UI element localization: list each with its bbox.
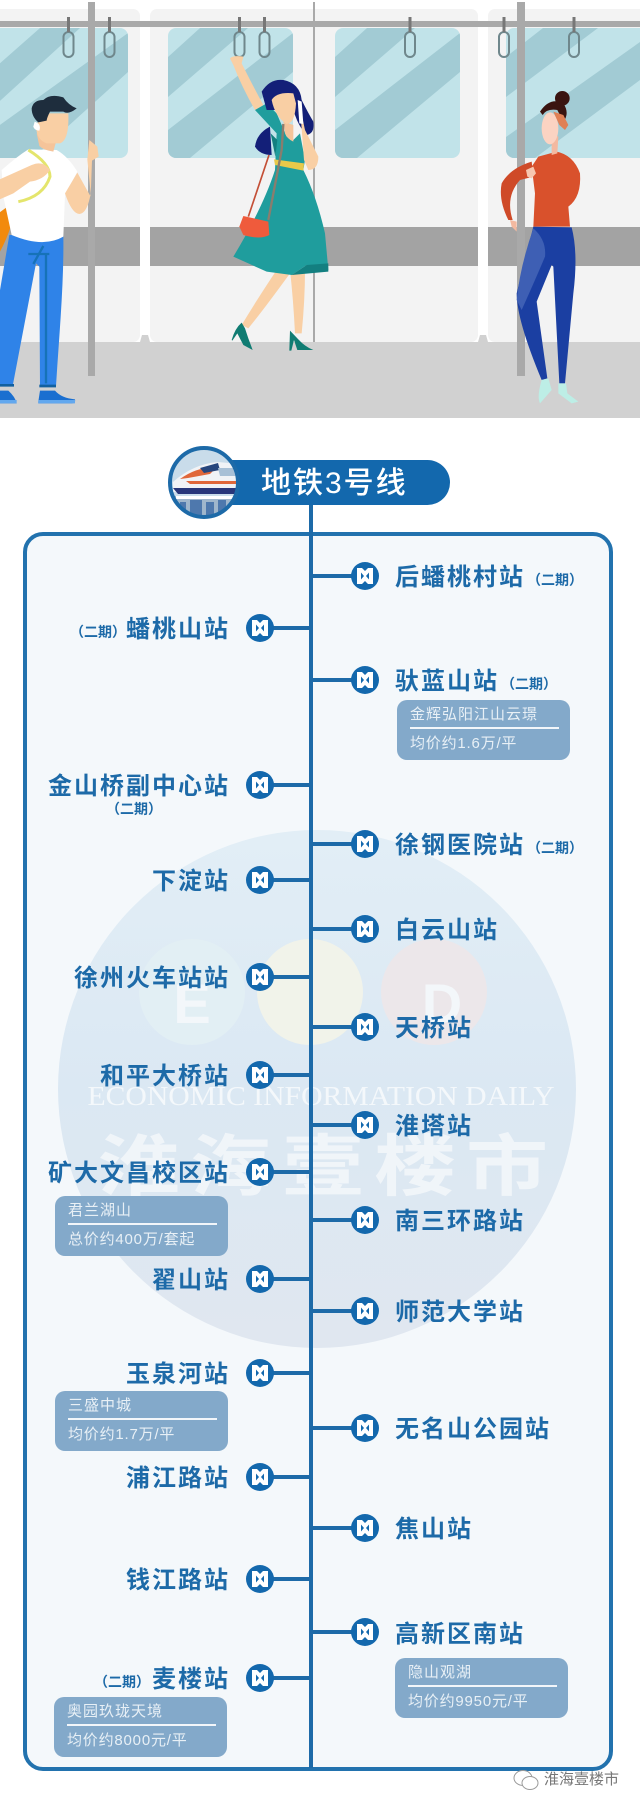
callout: 隐山观湖 [395,1658,568,1718]
callout: 隐山观湖: 隐山观湖 [408,1664,472,1681]
watermark: economic information daily logo: E [173,972,211,1035]
station: 驮蓝山站 [313,666,557,695]
footer watermark: 淮海壹楼市 [514,1770,619,1790]
door panels [0,9,640,342]
footer watermark: 淮海壹楼市: 淮海壹楼市 [544,1771,619,1788]
station: 金山桥副中心站: 金山桥副中心站 [48,773,230,800]
station: 玉泉河站 [126,1359,309,1388]
trunk line [309,505,313,1768]
station: 徐州火车站站: 徐州火车站站 [74,965,230,992]
carriage floor [0,335,640,418]
station: 白云山站 [313,915,499,944]
station: 矿大文昌校区站 [48,1158,309,1187]
station: 淮塔站 [313,1111,473,1140]
station: 高新区南站 [313,1618,525,1648]
station: 翟山站: 翟山站 [152,1267,230,1294]
station: 天桥站: 天桥站 [395,1015,473,1042]
station: 南三环路站 [313,1206,525,1235]
station: 金山桥副中心站 [48,771,309,800]
station: 和平大桥站 [100,1061,309,1090]
watermark: economic information daily logo: D [422,972,462,1035]
panel: route map [23,532,613,1771]
station: 蟠桃山站: （二期）蟠桃山站 [70,616,230,643]
callout: 金辉弘阳江山云璟 [397,700,570,760]
station: 师范大学站 [313,1297,525,1326]
station: 钱江路站: 钱江路站 [126,1567,230,1594]
station: 驮蓝山站: 驮蓝山站（二期） [395,668,557,695]
station: 白云山站: 白云山站 [395,917,499,944]
station: 淮塔站: 淮塔站 [395,1113,473,1140]
callout: 三盛中城 [55,1391,228,1451]
station: 和平大桥站: 和平大桥站 [100,1063,230,1090]
callout: 三盛中城: 三盛中城 [68,1397,132,1414]
station: 天桥站 [313,1013,473,1042]
callout: 奥园玖珑天境: 均价约8000元/平 [67,1732,188,1749]
station: 浦江路站 [126,1463,309,1492]
station: 翟山站 [152,1265,309,1294]
station: 浦江路站: 浦江路站 [126,1465,230,1492]
station: 麦楼站 [94,1664,309,1693]
illustration: subway carriage with passengers [0,2,640,418]
station: 焦山站: 焦山站 [395,1516,473,1543]
station: 师范大学站: 师范大学站 [395,1299,525,1326]
station: 焦山站 [313,1514,473,1543]
station: 后蟠桃村站: 后蟠桃村站（二期） [395,564,583,591]
station: 徐钢医院站 [313,830,583,859]
station: 玉泉河站: 玉泉河站 [126,1361,230,1388]
watermark: economic information daily logo: 淮海壹楼市 [98,1129,548,1204]
title pill: 地铁3号线: 地铁3号线 [261,467,408,500]
icon: train photo badge [168,446,240,519]
watermark: economic information daily logo: ECONOMIC INFORMATION DAILY [88,1080,555,1111]
station: 南三环路站: 南三环路站 [395,1208,525,1235]
callout: 奥园玖珑天境: 奥园玖珑天境 [67,1703,163,1720]
callout: 金辉弘阳江山云璟: 均价约1.6万/平 [410,735,517,752]
callout: 君兰湖山: 总价约400万/套起 [68,1231,195,1248]
figure: man with backpack [0,96,99,403]
station: 下淀站 [152,866,309,895]
callout: 奥园玖珑天境 [54,1697,227,1757]
grey wall band [0,227,640,266]
note: 金山桥副中心站 phase two: （二期） [106,801,162,817]
station: 高新区南站: 高新区南站 [395,1621,525,1648]
callout: 隐山观湖: 均价约9950元/平 [408,1693,529,1710]
hand straps [64,17,579,57]
station: 无名山公园站 [313,1414,551,1443]
callout: 金辉弘阳江山云璟: 金辉弘阳江山云璟 [410,706,538,723]
overhead rail [0,21,640,27]
vertical poles [88,2,525,376]
station: 麦楼站: （二期）麦楼站 [94,1666,230,1693]
station: 蟠桃山站 [70,614,309,643]
title pill: 地铁3号线 [210,460,450,505]
windows [0,28,640,158]
icon: chat bubbles [514,1770,538,1790]
callout: 君兰湖山 [55,1196,228,1256]
figure: woman in teal dress [230,56,328,351]
station: 下淀站: 下淀站 [152,868,230,895]
station: 徐州火车站站 [74,963,309,992]
station: 无名山公园站: 无名山公园站 [395,1416,551,1443]
callout: 君兰湖山: 君兰湖山 [68,1202,132,1219]
station: 矿大文昌校区站: 矿大文昌校区站 [48,1160,230,1187]
callout: 三盛中城: 均价约1.7万/平 [68,1426,175,1443]
station: 钱江路站 [126,1565,309,1594]
station: 后蟠桃村站 [313,562,583,591]
figure: woman in red sweater [501,91,580,403]
station: 徐钢医院站: 徐钢医院站（二期） [395,832,583,859]
